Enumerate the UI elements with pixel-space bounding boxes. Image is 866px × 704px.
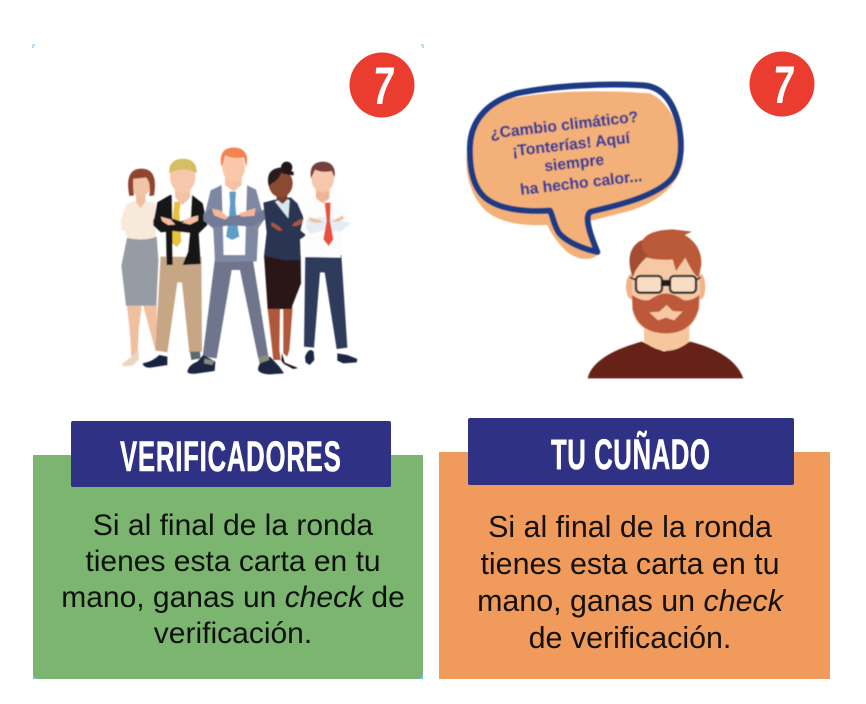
bubble fill (466, 91, 683, 259)
beard (632, 293, 699, 333)
illustration: group of five professionals (121, 147, 357, 374)
title banner (71, 421, 391, 487)
person: man with white shirt and red tie (301, 162, 357, 365)
panel: verificadores card (33, 45, 423, 679)
person: woman with grey skirt (121, 169, 158, 366)
bubble outline (470, 85, 681, 252)
body text: verificación. (154, 617, 312, 650)
neck (644, 320, 689, 351)
person: blond man with yellow tie (143, 159, 207, 368)
title banner: TU CUÑADO (551, 430, 710, 479)
number badge: 7 (370, 56, 397, 115)
number badge (350, 52, 414, 118)
person: woman in navy jacket (263, 162, 310, 369)
body text: tienes esta carta en tu (85, 545, 381, 578)
speech bubble (466, 85, 683, 259)
card corner marks (33, 45, 423, 48)
number badge (750, 52, 814, 116)
number badge: 7 (770, 55, 797, 114)
hair (630, 229, 701, 278)
body text: Si al final de la ronda (93, 509, 373, 542)
bubble text: ¿Cambio climático? (489, 109, 639, 143)
green info panel (33, 455, 423, 679)
bubble text: ha hecho calor... (519, 168, 643, 199)
illustration: bearded man with glasses (588, 229, 743, 378)
body text: tienes esta carta en tu (480, 547, 780, 581)
title banner: VERIFICADORES (120, 432, 341, 481)
body text: mano, ganas un check (477, 584, 785, 618)
body text: de verificación. (529, 621, 731, 655)
torso (588, 342, 743, 378)
body text: mano, ganas un check de (61, 581, 405, 614)
bubble text (489, 109, 646, 202)
bubble text: ¡Tonterías! Aquí (511, 130, 631, 160)
body text (477, 510, 785, 655)
title banner (468, 418, 794, 485)
body text (61, 509, 405, 650)
ears (626, 274, 637, 299)
orange info panel (439, 452, 830, 679)
body text: Si al final de la ronda (488, 510, 772, 544)
face (632, 257, 700, 333)
person: red-haired man in grey suit with blue tie (187, 147, 284, 374)
bubble text: siempre (543, 152, 605, 175)
glasses (630, 276, 701, 293)
panel: tu cuñado card (439, 52, 830, 679)
